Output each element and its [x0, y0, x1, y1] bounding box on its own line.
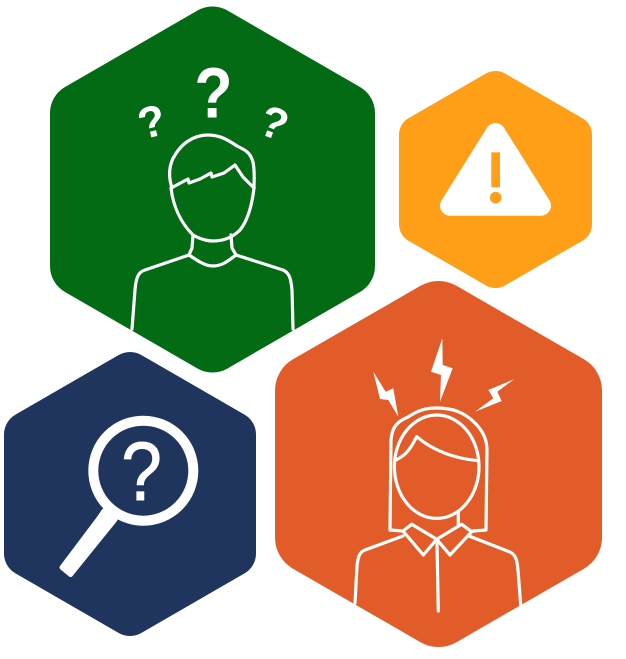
- icon: question mark in lens: ?: [121, 425, 162, 518]
- panel: navy hexagon, magnifying glass: [27, 375, 233, 613]
- icon: warning triangle: [450, 133, 541, 206]
- icon: magnifying glass: [62, 421, 193, 574]
- icon: center lightning bolt: [431, 338, 453, 402]
- icon: left question mark: ?: [133, 95, 171, 149]
- icon: exclamation mark: [490, 152, 502, 204]
- icon: man outline: [132, 135, 293, 329]
- panel: green hexagon, confused man: [80, 36, 345, 342]
- panel: red-orange hexagon, stressed woman: [311, 317, 566, 611]
- icon: left lightning bolt: [373, 372, 398, 417]
- icon: woman outline: [355, 408, 521, 611]
- icon: large question mark: ?: [194, 54, 233, 133]
- panel: orange hexagon, warning: [418, 90, 573, 269]
- icon: right question mark: ?: [253, 96, 295, 151]
- icon: right lightning bolt: [475, 379, 514, 412]
